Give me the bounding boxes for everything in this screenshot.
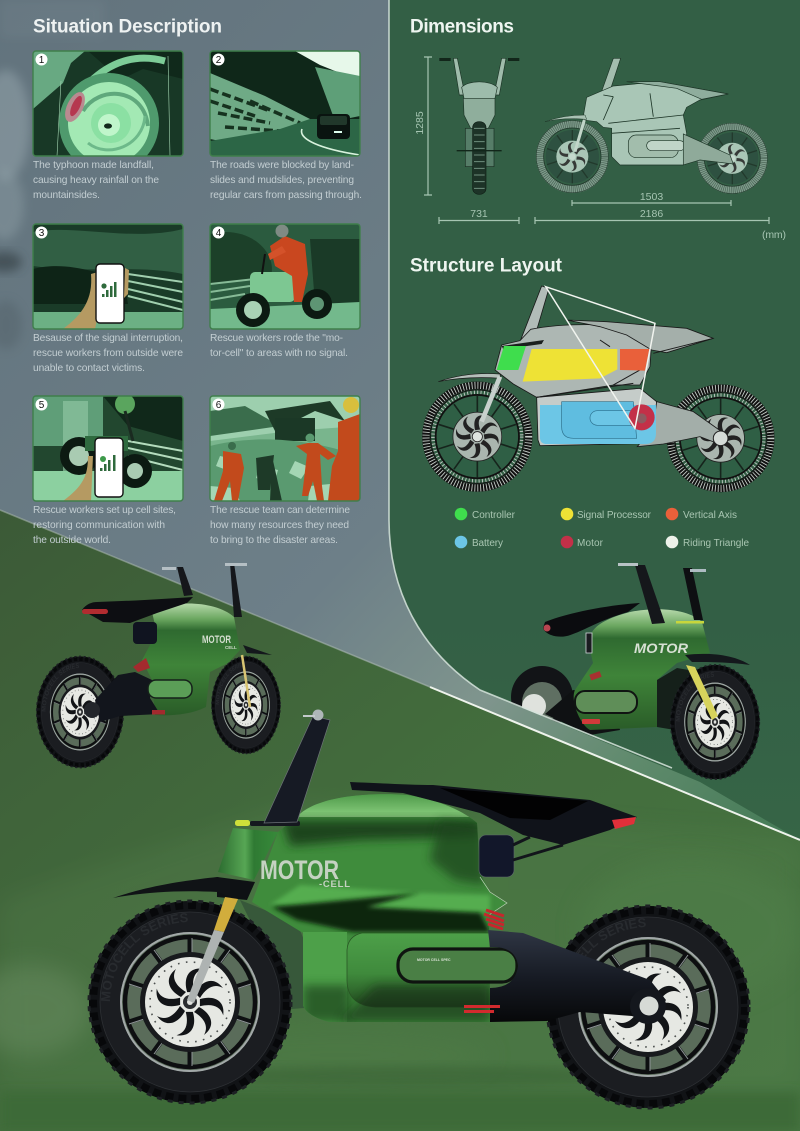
thumbnail 4: rescue worker riding bike xyxy=(210,224,360,329)
legend item: battery xyxy=(455,536,503,549)
dimension drawing: front view of bike xyxy=(439,58,519,194)
text: main MOTOR logo: MOTOR xyxy=(260,855,339,885)
badge 4 xyxy=(212,226,224,239)
seat strut xyxy=(513,837,563,860)
dimension line: wheelbase 1503 xyxy=(572,191,731,206)
battery cover panel xyxy=(347,933,490,1007)
caption 1: mountainsides. xyxy=(33,190,100,201)
foggy photo background at left edge xyxy=(0,0,105,349)
legend item: motor: Motor xyxy=(577,538,604,549)
badge 1: 1 xyxy=(39,55,45,66)
fork gold tube xyxy=(214,897,238,932)
thumbnail 3: phone showing no signal xyxy=(33,224,183,329)
caption 2: The roads were blocked by land- xyxy=(210,160,354,171)
riding triangle xyxy=(546,287,655,428)
dimension line: width 731: 731 xyxy=(470,208,488,220)
caption 6: The rescue team can determine xyxy=(210,505,350,516)
caption 5: the outside world. xyxy=(33,535,111,546)
bike render: rear three-quarter view on left xyxy=(37,563,280,768)
tail light xyxy=(612,817,636,829)
caption 3: rescue workers from outside were xyxy=(33,348,183,359)
fork collar xyxy=(217,877,255,900)
rear hub xyxy=(630,988,666,1024)
thumbnail 5: phone with signal restored xyxy=(33,394,183,501)
rear wheel xyxy=(547,906,749,1108)
badge 2: 2 xyxy=(216,55,222,66)
component: motor xyxy=(629,404,655,430)
fork silver tube xyxy=(187,930,224,1003)
thumbnail 6: rescue team on rubble xyxy=(210,396,360,501)
thumbnail 2: road blocked by landslide xyxy=(210,51,360,156)
curved panel edge line xyxy=(389,0,672,768)
front fender xyxy=(113,877,230,898)
caption 6: to bring to the disaster areas. xyxy=(210,535,338,546)
badge 6: 6 xyxy=(216,400,222,411)
component: vertical axis xyxy=(620,349,649,371)
badge 5 xyxy=(36,398,48,411)
dimension line: length 2186: 2186 xyxy=(640,208,663,220)
structure layout diagram xyxy=(426,286,771,488)
left panel: grey situation area with curved edge xyxy=(0,0,800,840)
heading: Structure Layout: Structure Layout xyxy=(410,256,563,276)
seat xyxy=(350,782,637,845)
thumbnail 1: typhoon satellite image xyxy=(32,50,184,157)
dimension line: height 1285: 1285 xyxy=(414,111,426,135)
unit label: (mm) xyxy=(762,229,786,241)
frame notch line xyxy=(480,877,507,915)
red footpeg bars xyxy=(464,1005,500,1013)
legend item: battery: Battery xyxy=(472,538,503,549)
legend item: controller xyxy=(455,508,516,521)
swingarm xyxy=(488,930,666,1024)
badge 2 xyxy=(212,54,224,66)
dark fairing behind front wheel xyxy=(240,900,304,1010)
caption 3: unable to contact victims. xyxy=(33,363,145,374)
legend item: motor xyxy=(561,536,604,549)
legend item: riding triangle: Riding Triangle xyxy=(683,538,749,549)
caption 1: causing heavy rainfall on the xyxy=(33,175,159,186)
dimension line: height 1285 xyxy=(414,57,432,195)
lower photo section with terrain xyxy=(0,510,800,1131)
cover slot xyxy=(398,949,517,982)
caption 3: Besause of the signal interruption, xyxy=(33,333,183,344)
caption 4: Rescue workers rode the "mo- xyxy=(210,333,343,344)
post base plate xyxy=(250,821,300,826)
badge 4: 4 xyxy=(216,228,222,239)
legend item: signal processor xyxy=(561,508,652,521)
legend item: vertical axis: Vertical Axis xyxy=(683,510,737,521)
badge 5: 5 xyxy=(39,400,45,411)
badge 3 xyxy=(36,226,48,239)
legend item: signal processor: Signal Processor xyxy=(577,510,652,521)
caption 5: restoring communication with xyxy=(33,520,165,531)
caption 4: tor-cell" to areas with no signal. xyxy=(210,348,348,359)
legend item: vertical axis xyxy=(666,508,737,521)
text: small bike logo left: MOTOR xyxy=(202,634,231,646)
bike render: front three-quarter view on right panel xyxy=(511,563,759,779)
bike render: main side view xyxy=(89,710,749,1108)
text: small bike cell label left: CELL xyxy=(225,645,237,650)
legend xyxy=(455,508,749,549)
caption 5: Rescue workers set up cell sites, xyxy=(33,505,176,516)
handlebar cap xyxy=(303,710,324,720)
text: main CELL logo: -CELL xyxy=(319,879,350,890)
shock spring xyxy=(484,910,504,929)
component: battery xyxy=(540,405,656,444)
dimension line: wheelbase 1503: 1503 xyxy=(640,191,663,203)
main body shell xyxy=(252,794,506,1022)
dimension line: length 2186 xyxy=(535,208,769,224)
diagonal white divider line xyxy=(0,510,800,840)
caption 2: slides and mudslides, preventing xyxy=(210,175,354,186)
cover slot: MOTOR CELL SPEC xyxy=(417,958,451,962)
component: signal processor xyxy=(523,349,617,382)
heading: Situation Description: Situation Description xyxy=(33,16,222,38)
badge 6 xyxy=(212,398,224,411)
dimension drawing: side view of bike xyxy=(536,58,767,193)
legend item: controller: Controller xyxy=(472,510,516,521)
caption 1: The typhoon made landfall, xyxy=(33,160,154,171)
component: controller xyxy=(497,346,526,370)
badge 3: 3 xyxy=(39,228,45,239)
neck xyxy=(218,828,278,880)
front wheel xyxy=(89,901,291,1103)
yellow marker xyxy=(235,820,250,826)
legend item: riding triangle xyxy=(666,536,749,549)
dimension line: width 731 xyxy=(439,208,519,224)
rear box xyxy=(479,835,514,877)
handlebar post xyxy=(264,716,330,823)
heading: Dimensions: Dimensions xyxy=(410,16,514,38)
text: small bike logo right: MOTOR xyxy=(634,640,689,656)
badge 1 xyxy=(36,54,48,66)
caption 6: how many resources they need xyxy=(210,520,349,531)
caption 2: regular cars from passing through. xyxy=(210,190,362,201)
